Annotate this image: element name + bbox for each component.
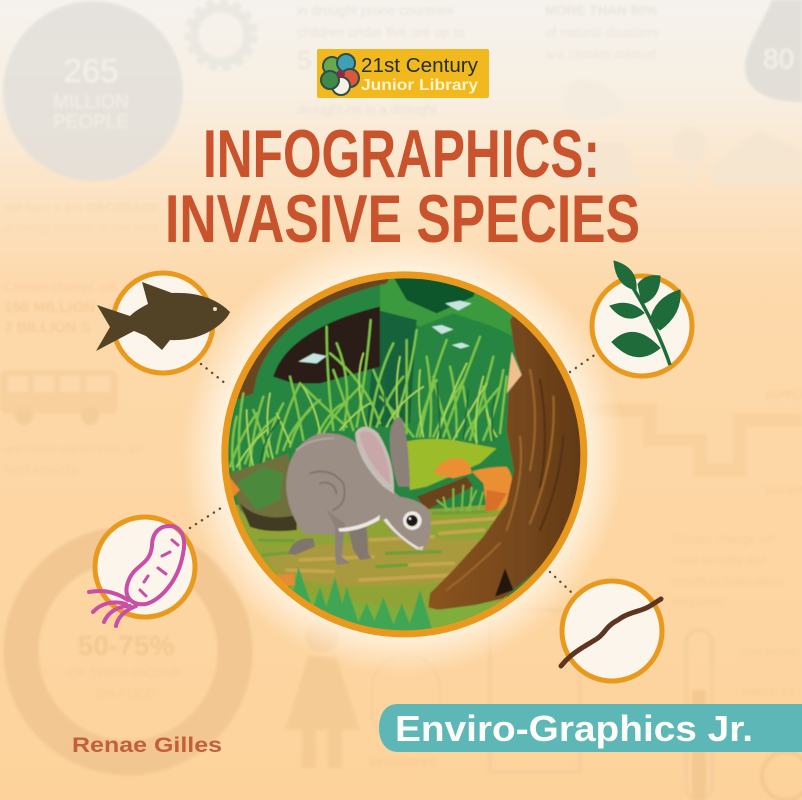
ghost globe statistic [3,1,183,181]
icon circle: bacteria [89,517,195,626]
rabbit far ear [390,417,410,487]
icon: leaf branch [610,261,680,365]
foreground grass [308,595,500,628]
ghost donut chart [21,544,235,758]
canopy foliage [380,278,513,336]
title: INFOGRAPHICS: [203,116,600,192]
series banner: Enviro-Graphics Jr. [395,708,753,749]
ghost crop text: food security [4,461,78,476]
ghost right text: have security and [672,553,766,567]
ghost donut chart: 50-75% [78,630,174,661]
ghost donut chart: ON FOOD [96,686,156,701]
ghost sun icon [188,2,254,68]
icon: worm [561,599,661,666]
ghost disasters text: are climate related [545,47,656,62]
scene backdrop [228,284,539,598]
rabbit legs [327,510,350,565]
ghost resources icon [370,655,440,769]
tall grass [230,320,507,470]
rabbit chin stripe [383,518,423,550]
icon circle: fish [96,273,230,373]
ghost crop text: growing season in the next [4,220,159,235]
ghost crop text: will face a 5% DECREASE [3,200,160,215]
ghost drought text: children under five are up to [297,25,464,40]
rabbit body [286,433,431,549]
logo wordmark: 21st Century [361,55,478,77]
ghost disasters text [545,3,659,62]
main illustration circle [220,270,590,640]
title: INVASIVE SPECIES [165,181,640,257]
orange fungus [433,458,513,512]
publisher logo [317,49,489,98]
ghost globe statistic: PEOPLE [53,112,129,133]
branch and hollow [237,279,390,400]
ghost phone frame [490,610,580,772]
ghost corner icon [762,752,802,800]
icon circle: leaf [592,261,692,376]
ghost water drop: 80 [763,43,794,74]
log and mossy rock [230,453,295,530]
ghost donut chart: OF THEIR INCOME [68,665,184,680]
logo flower icon [321,54,359,95]
ghost bus [0,370,118,425]
author name: Renae Gilles [72,734,222,757]
grass tuft [437,485,483,512]
ghost right text: 10% MORE [740,647,798,659]
ghost thermometer [686,630,712,800]
ghost right text: Climate change will [672,532,775,546]
ghost houses [555,79,802,185]
title [165,116,640,257]
rabbit [286,417,431,565]
fallen branch [417,477,473,510]
rabbit haunch shading [297,438,345,510]
root hollow [495,568,513,597]
ghost water drop [745,0,802,102]
rabbit collar stripe [338,515,380,532]
ghost drought text: drought-hit in a drought [297,102,437,117]
ghost drought text [297,3,464,117]
rabbit eye [403,511,422,530]
ghost right text: frequently [672,595,725,609]
ghost right text: THREE AS [740,687,795,699]
ghost disasters text: MORE THAN 80% [545,3,658,18]
icon circle: worm [561,581,662,681]
central glow [181,231,625,675]
icon: bacterium [89,526,184,626]
ghost crop text: Climate change will [4,279,116,294]
ghost disasters text: of natural disasters [545,25,659,40]
butterflies [298,301,472,363]
ghost right text [672,390,802,699]
ghost crop text: 2 BILLION S [4,319,91,336]
tree trunk [428,303,590,612]
series banner [379,704,802,752]
ghost resources icon: RESOURCES [370,757,436,769]
icon: fish [96,282,230,351]
ghost person figure [285,619,360,768]
ghost crop text [3,200,160,476]
ghost crop text: 150 MILLION [4,299,95,316]
rabbit nose [417,546,424,551]
ghost drought text: 5 [297,45,311,75]
meadow [400,439,497,490]
publisher logo: Junior Library [361,77,478,94]
ghost globe statistic: 265 [63,52,119,89]
ghost right text: results in many ways [672,574,783,588]
connector dots [190,354,596,610]
ghost drought text: in drought prone countries [297,3,454,18]
rabbit near ear [355,427,394,494]
ghost globe statistic: MILLION [53,92,129,113]
ghost crop text: are more within their, as [4,441,143,456]
ghost supply and demand line [586,410,802,470]
ground [236,503,508,610]
